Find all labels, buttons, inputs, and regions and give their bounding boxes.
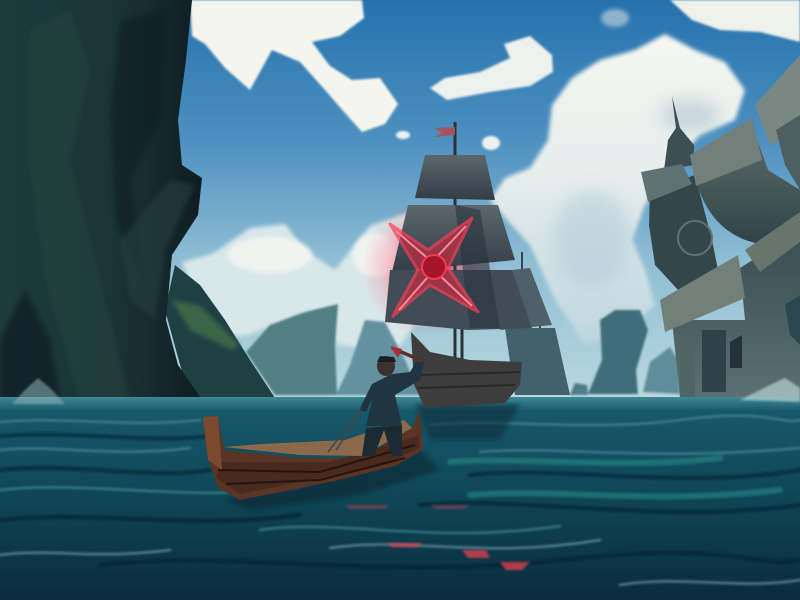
water ripples	[0, 416, 800, 585]
cloud: top right	[670, 0, 800, 42]
rock: mid far	[336, 320, 420, 395]
cloud: tiny puffs	[396, 131, 500, 150]
red star glow	[362, 200, 498, 336]
foam: cliff base	[12, 378, 65, 404]
sky	[0, 0, 800, 400]
rock: right sea stack	[588, 310, 648, 394]
cloud: horizon left	[182, 212, 418, 352]
rock: mossy far	[246, 304, 338, 395]
castle: top right tower	[755, 55, 800, 145]
main sail	[392, 205, 515, 272]
red star emblem	[390, 218, 478, 316]
boat shadow	[225, 450, 440, 510]
far ship	[500, 252, 570, 395]
figure: man with axe	[360, 346, 424, 456]
rock: mossy beside cliff	[165, 265, 277, 401]
rope	[328, 408, 362, 452]
distant rocks	[246, 304, 680, 395]
cloud: top center	[190, 0, 398, 132]
castle: balcony	[660, 255, 745, 332]
castle: right	[641, 55, 800, 398]
boat interior	[224, 420, 412, 456]
flag	[434, 127, 455, 137]
cliff: left	[0, 0, 205, 404]
masts	[455, 122, 462, 360]
main ship	[385, 122, 532, 408]
red reflections	[345, 505, 530, 570]
ship reflection	[415, 404, 520, 440]
castle: main walls	[672, 230, 800, 398]
clouds	[182, 0, 800, 352]
cloud: small center	[430, 36, 553, 100]
foam: castle base	[740, 378, 800, 402]
cloud: right large	[490, 34, 745, 345]
castle: doorways	[702, 330, 726, 392]
hull	[411, 332, 522, 408]
castle: left round tower	[649, 175, 722, 292]
lower sail	[385, 270, 532, 330]
boat hull	[203, 410, 423, 500]
castle: central tower	[692, 125, 800, 246]
rock: far right	[643, 347, 680, 394]
top sail	[415, 155, 495, 200]
rowboat	[203, 408, 440, 510]
castle: spire	[664, 96, 694, 170]
sea	[0, 397, 800, 600]
rock: small	[570, 383, 588, 395]
